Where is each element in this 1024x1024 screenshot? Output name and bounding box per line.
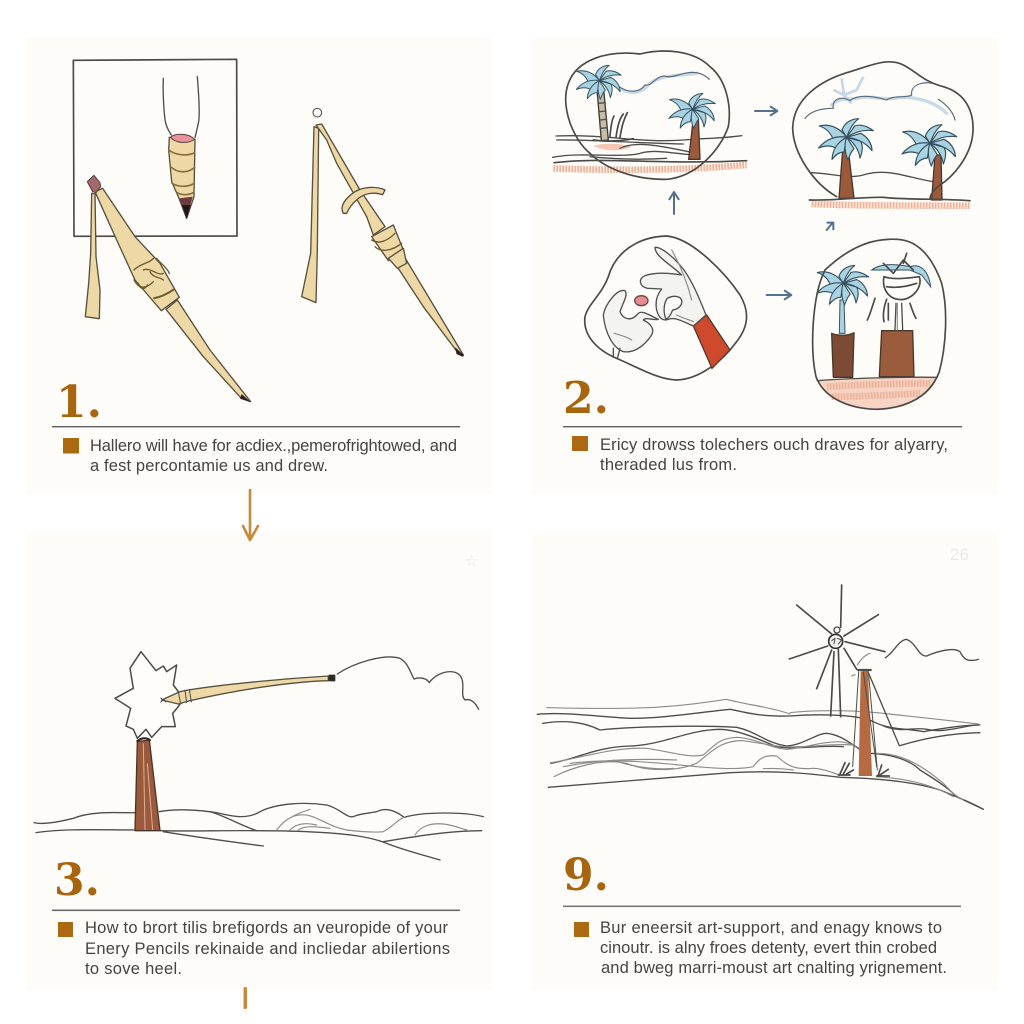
step number: 2.	[563, 373, 609, 424]
divider	[563, 426, 962, 427]
inset frame with pencil tip	[73, 59, 237, 236]
step number: 1.	[56, 377, 102, 428]
step number: 9.	[563, 850, 609, 901]
bullet	[58, 922, 73, 937]
illustration: windmill over hills	[537, 585, 983, 809]
faint page number: 26	[950, 545, 969, 564]
step text: and bweg marri-moust art cnalting yrignement.	[601, 959, 947, 977]
step text: a fest percontamie us and drew.	[90, 457, 328, 475]
arrows between vignettes	[669, 107, 833, 299]
step text: Hallero will have for acdiex.,pemerofrightowed, and	[90, 437, 457, 455]
vignette: potted palms	[813, 239, 946, 409]
step text: theraded lus from.	[600, 456, 737, 474]
bullet	[572, 436, 588, 451]
step text: Enery Pencils rekinaide and incliedar abilertions	[85, 940, 450, 958]
faint page mark: ☆	[465, 553, 478, 570]
step text	[85, 919, 450, 978]
divider	[563, 906, 961, 907]
panel: step 3	[26, 532, 493, 990]
step text: Bur eneersit art-support, and enagy knows to	[600, 919, 942, 937]
brush 2 with guard and strap	[302, 108, 463, 356]
step text	[600, 436, 948, 474]
bullet	[574, 922, 589, 937]
step text: How to brort tilis brefigords an veuropide of your	[85, 919, 448, 937]
divider	[52, 426, 460, 427]
arrow stub below step 3	[244, 987, 247, 1009]
vignette: palms by the shore	[553, 51, 747, 179]
panel: step 1	[26, 38, 493, 494]
brush 1 with strap	[85, 175, 251, 402]
step text	[90, 437, 457, 475]
step number: 3.	[54, 855, 100, 906]
panel: step 4	[531, 532, 998, 990]
illustration: brush and star tree	[34, 652, 483, 860]
step text: cinoutr. is alny froes detenty, evert thin crobed	[600, 939, 937, 957]
step text: to sove heel.	[85, 960, 182, 978]
vignette: two palms under clouds	[793, 62, 973, 206]
arrow: step 1 to step 3	[243, 490, 258, 540]
step text	[600, 919, 947, 977]
bullet	[63, 438, 79, 454]
panel: step 2	[531, 38, 998, 494]
vignette: hands	[585, 236, 747, 380]
step text: Ericy drowss tolechers ouch draves for alyarry,	[600, 436, 948, 454]
divider	[52, 910, 460, 911]
